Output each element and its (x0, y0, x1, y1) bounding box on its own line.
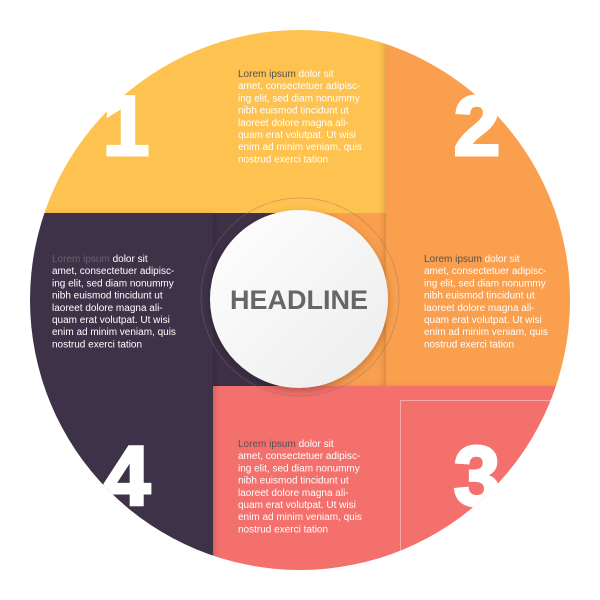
number 2: 2 (454, 79, 500, 173)
text block 4 (52, 254, 176, 350)
text block 4: nostrud exerci tation (52, 339, 142, 350)
text block 1: quam erat volutpat. Ut wisi (238, 130, 356, 141)
text block 1: amet, consectetuer adipisc- (238, 81, 360, 92)
text block 3: ing elit, sed diam nonummy (238, 463, 360, 474)
text block 4: laoreet dolore magna ali- (52, 303, 163, 314)
text block 2 (424, 254, 548, 350)
text block 2: enim ad minim veniam, quis (424, 327, 548, 338)
text block 2: quam erat volutpat. Ut wisi (424, 315, 542, 326)
text block 2: nibh euismod tincidunt ut (424, 291, 535, 302)
text block 1: nostrud exerci tation (238, 154, 328, 165)
text block 1: nibh euismod tincidunt ut (238, 106, 349, 117)
text block 1: enim ad minim veniam, quis (238, 142, 362, 153)
text block 3 (238, 439, 362, 535)
headline: HEADLINE (230, 285, 368, 315)
text block 2: laoreet dolore magna ali- (424, 303, 535, 314)
text block 1: ing elit, sed diam nonummy (238, 93, 360, 104)
text block 2: nostrud exerci tation (424, 339, 514, 350)
panel: orange 2 (382, 43, 570, 388)
text block 2: ing elit, sed diam nonummy (424, 278, 546, 289)
text block 3: quam erat volutpat. Ut wisi (238, 500, 356, 511)
text block 4: nibh euismod tincidunt ut (52, 291, 163, 302)
text block 4: amet, consectetuer adipisc- (52, 266, 174, 277)
text block 3: Lorem ipsum dolor sit (238, 439, 334, 450)
ring (201, 198, 399, 396)
text block 3: amet, consectetuer adipisc- (238, 451, 360, 462)
panel: dark 4 (30, 212, 218, 556)
text block 3: laoreet dolore magna ali- (238, 488, 349, 499)
headline circle (210, 210, 388, 388)
text block 2: Lorem ipsum dolor sit (424, 254, 520, 265)
panel: yellow 1 (44, 30, 386, 213)
text block 3: enim ad minim veniam, quis (238, 512, 362, 523)
panel: pink 3 (213, 384, 556, 570)
text block 4: enim ad minim veniam, quis (52, 327, 176, 338)
text block 2: amet, consectetuer adipisc- (424, 266, 546, 277)
text block 1 (238, 69, 362, 165)
text block 1: laoreet dolore magna ali- (238, 118, 349, 129)
number 3: 3 (454, 429, 500, 523)
text block 4: ing elit, sed diam nonummy (52, 278, 174, 289)
number 4: 4 (104, 429, 151, 523)
text block 1: Lorem ipsum dolor sit (238, 69, 334, 80)
text block 4: quam erat volutpat. Ut wisi (52, 315, 170, 326)
text block 3: nibh euismod tincidunt ut (238, 476, 349, 487)
number 1: 1 (103, 79, 149, 173)
text block 3: nostrud exerci tation (238, 524, 328, 535)
text block 4: Lorem ipsum dolor sit (52, 254, 148, 265)
